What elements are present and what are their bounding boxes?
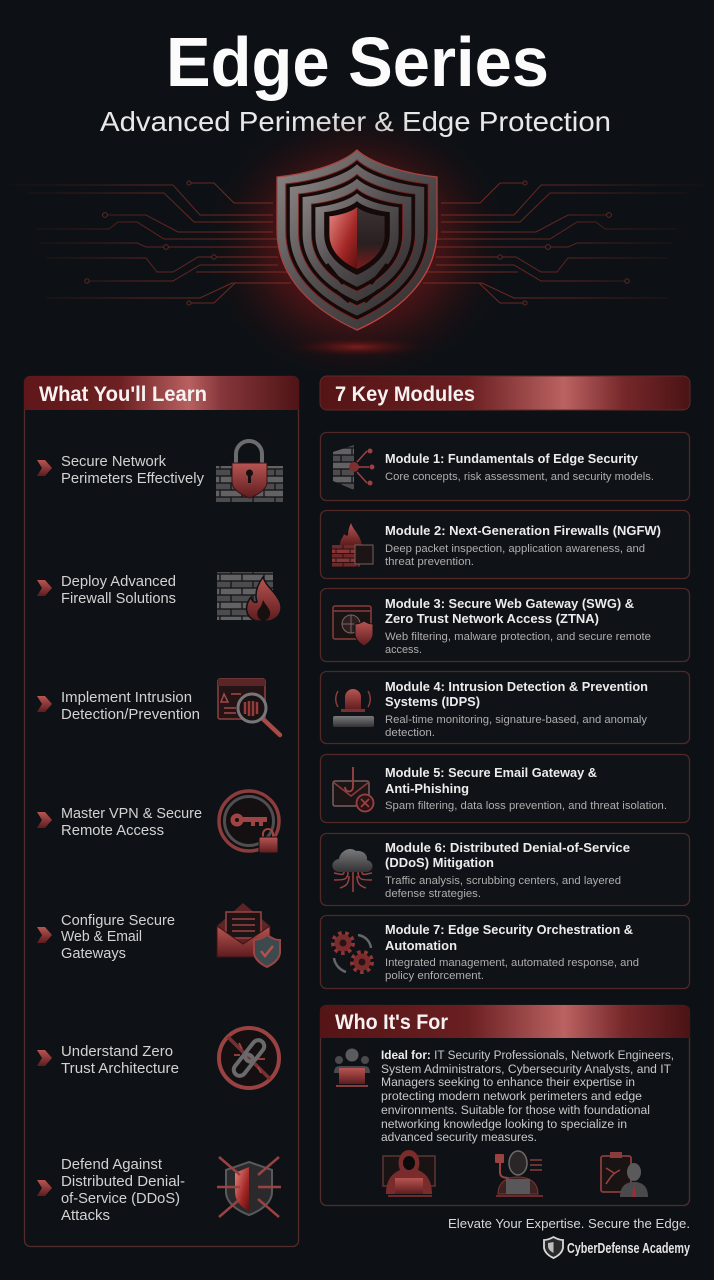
icon: team with laptop [334, 1048, 370, 1087]
item: secure web and email gateways [37, 903, 280, 967]
icon: hooded analyst [383, 1150, 435, 1197]
item: secure network perimeters: Secure Network [61, 454, 167, 470]
module 4 card: Real-time monitoring, signature-based, and anomaly [385, 714, 648, 726]
item: deploy advanced firewall: Firewall Solutions [61, 591, 176, 607]
module 2 card: Deep packet inspection, application awareness, and [385, 543, 645, 555]
module 6 card: Module 6: Distributed Denial-of-Service [385, 840, 630, 855]
module 4 card: Module 4: Intrusion Detection & Prevention [385, 679, 648, 694]
module 6 card: Traffic analysis, scrubbing centers, and layered [385, 875, 621, 887]
item: secure web and email gateways: Configure Secure [61, 913, 175, 929]
text: ideal for: environments. Suitable for those with foundational [381, 1103, 650, 1117]
icon: manager with clipboard [601, 1152, 648, 1197]
item: deploy advanced firewall [37, 572, 281, 621]
item: ddos defense: Attacks [61, 1208, 110, 1224]
text: ideal for: networking knowledge looking to specialize in [381, 1117, 627, 1131]
header: who it's for [320, 1005, 690, 1038]
item: secure network perimeters [37, 441, 283, 502]
item: intrusion detection: Implement Intrusion [61, 690, 192, 706]
module 2 card: Module 2: Next-Generation Firewalls (NGFW) [385, 523, 661, 538]
module 7 card: Integrated management, automated response, and [385, 957, 639, 969]
header: 7 key modules [320, 376, 690, 410]
item: ddos defense: Defend Against [61, 1157, 162, 1173]
text: ideal for: Managers seeking to enhance their expertise in [381, 1075, 635, 1089]
module 7 card: Automation [385, 938, 457, 953]
item: zero trust architecture: Trust Architecture [61, 1061, 179, 1077]
module 7 card: policy enforcement. [385, 970, 484, 982]
icon: cloud with traffic arrows [332, 849, 373, 892]
module 4 card [320, 672, 690, 744]
icon: padlock on wall [216, 441, 283, 502]
item: zero trust architecture [37, 1028, 279, 1088]
icon: broken chain prohibited [219, 1028, 279, 1088]
header: what you'll learn: What You'll Learn [39, 382, 207, 406]
module 5 card [320, 754, 690, 822]
item: intrusion detection [37, 679, 280, 735]
module 7 card: Module 7: Edge Security Orchestration & [385, 922, 633, 937]
item: ddos defense: of-Service (DDoS) [61, 1191, 180, 1207]
icon: wall with network [333, 445, 374, 490]
module 6 card [320, 834, 690, 906]
module 6 card: (DDoS) Mitigation [385, 855, 494, 870]
text: ideal for: Ideal for: IT Security Professionals, Network Engineers, [381, 1048, 674, 1062]
module 2 card: threat prevention. [385, 556, 474, 568]
item: secure network perimeters: Perimeters Effectively [61, 471, 205, 487]
item: deploy advanced firewall: Deploy Advanced [61, 574, 176, 590]
module 5 card: Module 5: Secure Email Gateway & [385, 765, 597, 780]
icon: browser globe shield [333, 606, 373, 646]
icon: network engineer [495, 1151, 543, 1197]
panel: who it's for [320, 1005, 690, 1206]
icon: window and magnifier [218, 679, 280, 735]
module 3 card: Web filtering, malware protection, and secure remote [385, 631, 651, 643]
module 1 card: Module 1: Fundamentals of Edge Security [385, 451, 639, 466]
item: ddos defense: Distributed Denial- [61, 1174, 185, 1190]
icon: shield under attack arrows [217, 1157, 281, 1217]
module 3 card: access. [385, 644, 422, 656]
text: ideal for [381, 1048, 674, 1144]
title: Edge Series [166, 23, 549, 101]
subtitle: Advanced Perimeter & Edge Protection [100, 106, 611, 137]
item: vpn and remote access: Master VPN & Secure [61, 806, 202, 822]
text: ideal for: System Administrators, Cybersecurity Analysts, and IT [381, 1062, 672, 1076]
item: zero trust architecture: Understand Zero [61, 1044, 173, 1060]
text: ideal for: protecting modern network perimeters and edge [381, 1089, 642, 1103]
hero: shield with circuit lines [9, 110, 705, 380]
module 5 card: Spam filtering, data loss prevention, and threat isolation. [385, 800, 667, 812]
header: 7 key modules: 7 Key Modules [335, 382, 475, 406]
item: ddos defense [37, 1157, 281, 1224]
module 3 card: Module 3: Secure Web Gateway (SWG) & [385, 596, 634, 611]
item: intrusion detection: Detection/Prevention [61, 707, 200, 723]
logo: cyberdefense academy [544, 1237, 690, 1258]
item: secure web and email gateways: Gateways [61, 946, 126, 962]
tagline: Elevate Your Expertise. Secure the Edge. [448, 1216, 690, 1231]
module 4 card: Systems (IDPS) [385, 694, 480, 709]
icon: central shield [277, 150, 437, 330]
icon: key in ring with lock [219, 791, 279, 853]
icon: envelope with shield [217, 903, 280, 967]
module 4 card: detection. [385, 727, 435, 739]
item: secure web and email gateways: Web & Email [61, 929, 142, 945]
module 2 card [320, 510, 690, 578]
header: who it's for: Who It's For [335, 1010, 449, 1034]
module 3 card [320, 588, 690, 662]
icon: siren on device [333, 689, 374, 727]
module 3 card: Zero Trust Network Access (ZTNA) [385, 611, 599, 626]
icon: brick wall and flame [217, 572, 281, 621]
item: vpn and remote access: Remote Access [61, 823, 164, 839]
module 7 card [320, 916, 690, 988]
item: vpn and remote access [37, 791, 279, 853]
panel: what you'll learn [24, 376, 299, 1246]
icon: flame over firewall [332, 523, 373, 567]
module 1 card: Core concepts, risk assessment, and security models. [385, 471, 654, 483]
icon: phishing envelope [333, 767, 374, 812]
module 5 card: Anti-Phishing [385, 781, 469, 796]
text: ideal for: advanced security measures. [381, 1130, 537, 1144]
module 1 card [320, 432, 690, 500]
header: what you'll learn [24, 376, 299, 410]
module 6 card: defense strategies. [385, 888, 481, 900]
icon: gears [333, 933, 372, 972]
